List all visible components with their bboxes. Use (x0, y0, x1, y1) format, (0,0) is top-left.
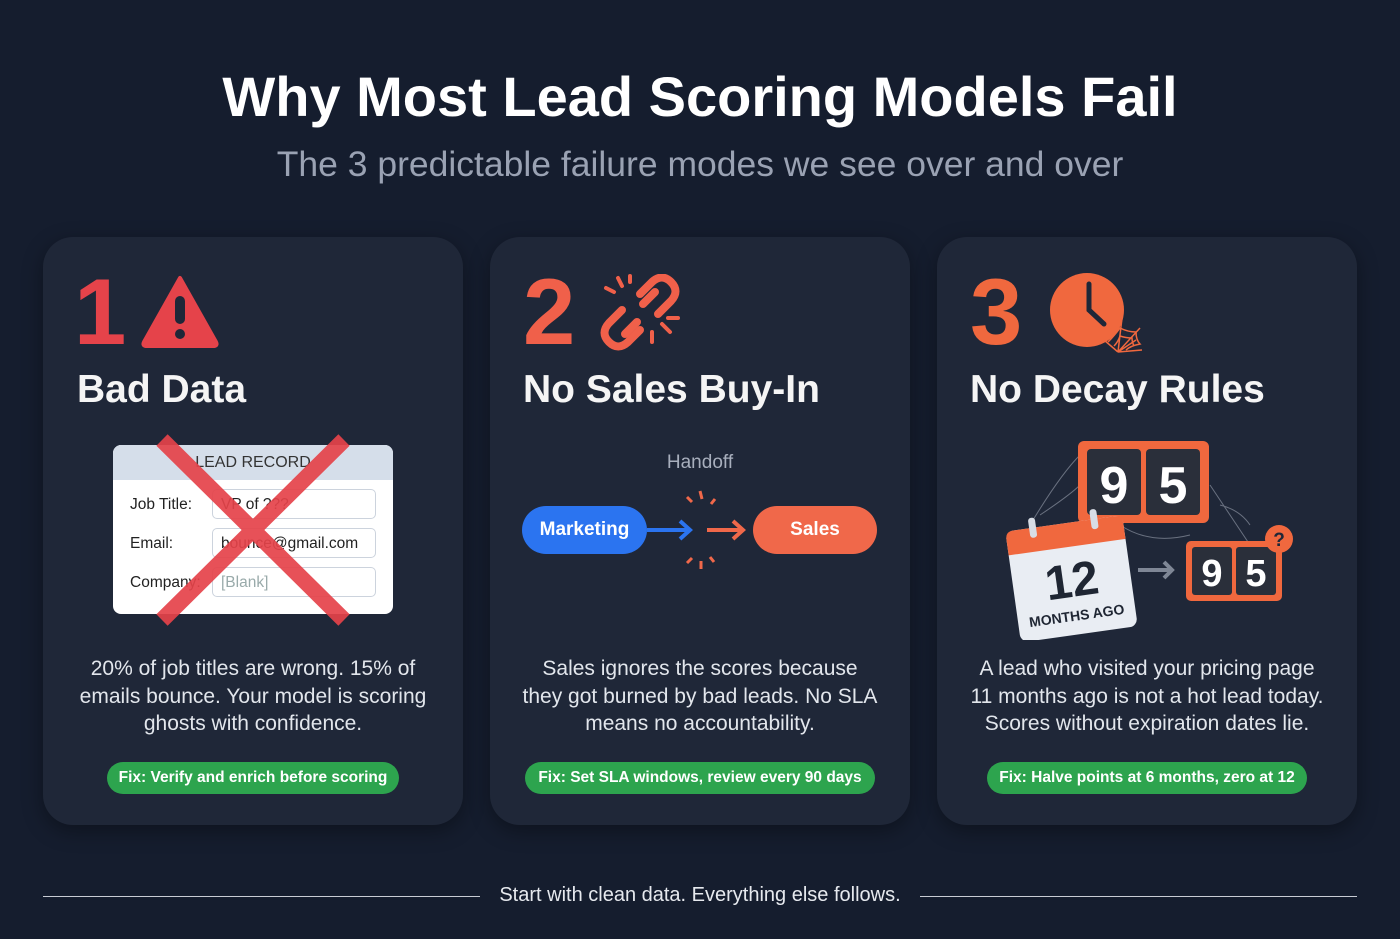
description 2: means no accountability. (585, 712, 815, 735)
panel: no sales buy-in (490, 237, 910, 825)
lead record card: bounce@gmail.com (221, 535, 358, 552)
lead record card: VP of ??? (221, 496, 289, 513)
fix 3 (987, 762, 1307, 794)
heading: no sales buy-in: No Sales Buy-In (523, 368, 820, 411)
panel: bad data (43, 237, 463, 825)
fix 2: Fix: Set SLA windows, review every 90 days (538, 769, 862, 786)
calendar: MONTHS AGO (1028, 601, 1125, 630)
small flip 95: ? (1273, 530, 1285, 551)
description 2: Sales ignores the scores because (542, 657, 858, 680)
big flip 95: 9 (1100, 457, 1128, 515)
lead record card: Company: (130, 574, 201, 591)
number 3: 3 (970, 259, 1022, 364)
lead record card: Email: (130, 535, 173, 552)
cobwebs (1030, 455, 1250, 545)
heading: bad data: Bad Data (77, 368, 246, 411)
handoff diagram: Handoff (667, 452, 733, 473)
description 3: 11 months ago is not a hot lead today. (971, 684, 1323, 708)
arrow (1138, 562, 1172, 578)
big flip 95 (1078, 441, 1209, 523)
handoff diagram (522, 452, 877, 569)
description 1 (80, 657, 426, 735)
lead record card: [Blank] (221, 574, 268, 591)
footer: Start with clean data. Everything else follows. (499, 884, 901, 906)
title: Why Most Lead Scoring Models Fail (222, 65, 1178, 128)
small flip 95: 9 (1201, 553, 1223, 595)
icon: clock with web (1050, 273, 1142, 353)
icon: red X (156, 434, 350, 626)
description 2 (522, 657, 878, 735)
number 1: 1 (74, 259, 126, 364)
small flip 95 (1186, 525, 1293, 601)
icon: broken link (600, 274, 680, 350)
description 3: Scores without expiration dates lie. (985, 712, 1309, 735)
description 3: A lead who visited your pricing page (979, 657, 1315, 680)
fix 1: Fix: Verify and enrich before scoring (119, 769, 387, 786)
calendar (1004, 505, 1138, 642)
fix 1 (107, 762, 399, 794)
handoff diagram: Sales (790, 519, 840, 540)
calendar: 12 (1042, 551, 1102, 611)
big flip 95: 5 (1159, 457, 1187, 515)
lead record card: LEAD RECORD (195, 454, 311, 471)
description 2: they got burned by bad leads. No SLA (523, 684, 877, 708)
subtitle: The 3 predictable failure modes we see over and over (277, 144, 1123, 184)
handoff diagram: Marketing (540, 519, 629, 540)
description 3 (971, 657, 1323, 735)
small flip 95: 5 (1245, 553, 1267, 595)
number 2: 2 (523, 259, 575, 364)
lead record card: Job Title: (130, 496, 192, 513)
description 1: ghosts with confidence. (144, 712, 362, 735)
heading: no decay rules: No Decay Rules (970, 368, 1265, 411)
lead record card (113, 445, 393, 614)
fix 2 (525, 762, 875, 794)
icon: warning triangle (141, 276, 219, 348)
fix 3: Fix: Halve points at 6 months, zero at 12 (999, 769, 1295, 786)
decay illustration (1006, 441, 1293, 640)
description 1: 20% of job titles are wrong. 15% of (91, 657, 415, 680)
description 1: emails bounce. Your model is scoring (80, 684, 426, 708)
panel: no decay rules (937, 237, 1357, 825)
